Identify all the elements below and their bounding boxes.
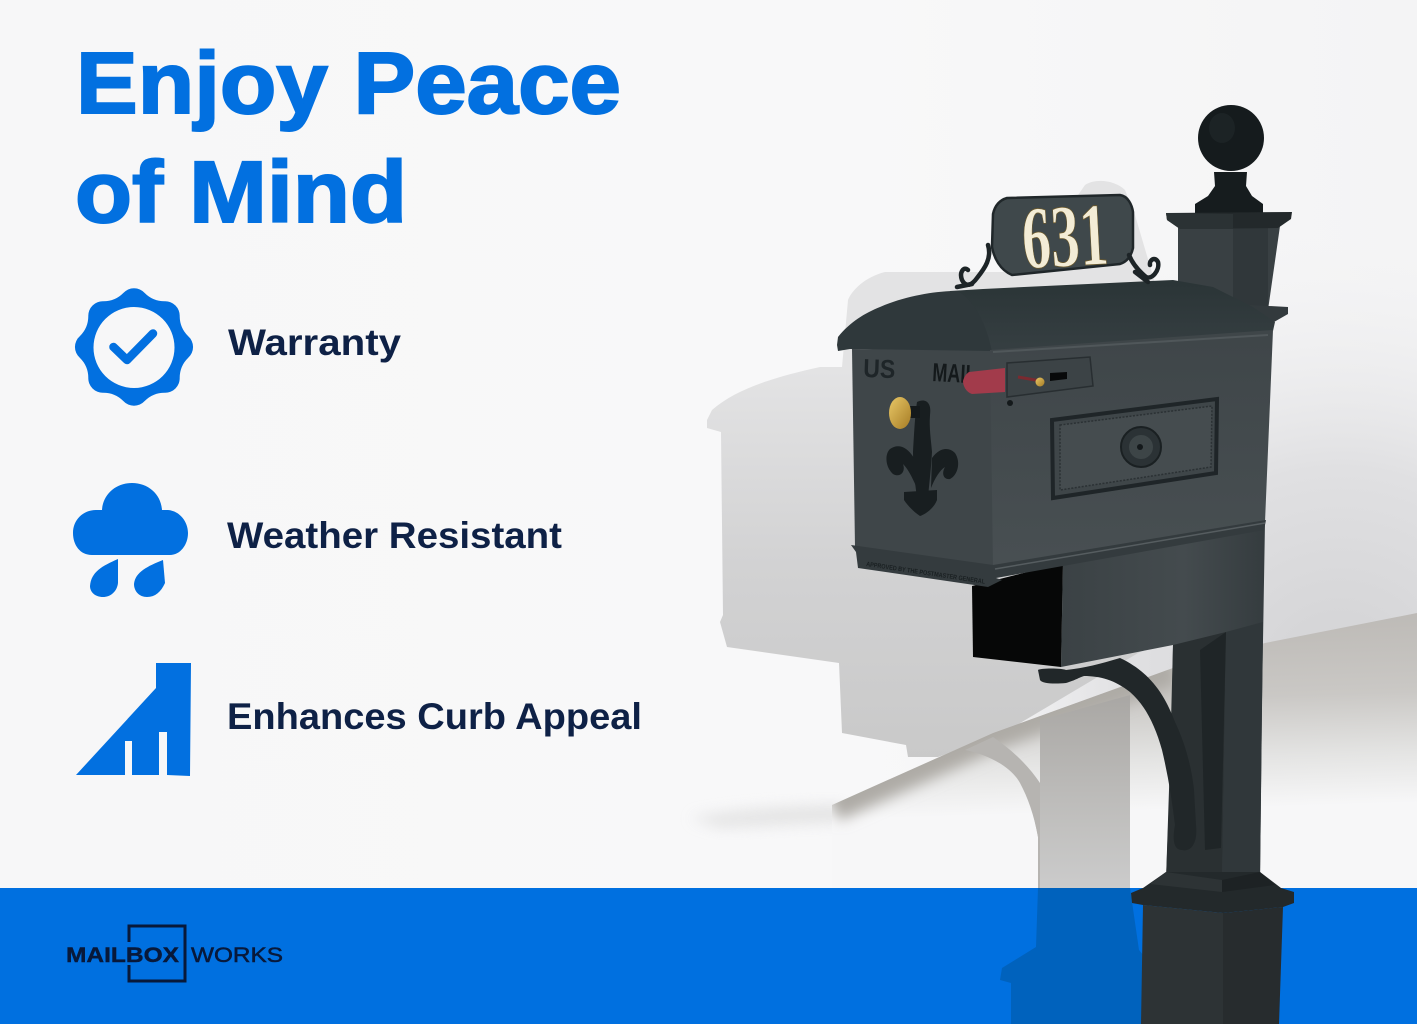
fleur-de-lis ornament xyxy=(886,401,958,516)
title: Enjoy Peace xyxy=(76,35,621,132)
logo: mailbox works: MAILBOX xyxy=(66,944,179,967)
plate scroll supports xyxy=(957,245,1158,287)
ground fade left xyxy=(690,804,860,828)
shadow on footer band xyxy=(1000,888,1160,1024)
wall shading xyxy=(800,200,1417,840)
title: of Mind xyxy=(75,144,407,241)
label: enhances curb appeal: Enhances Curb Appeal xyxy=(227,696,642,737)
mailbox product illustration xyxy=(837,105,1294,1024)
lower support post xyxy=(1061,522,1265,880)
post base trim xyxy=(1131,872,1294,913)
embossed lip text: APPROVED BY THE POSTMASTER GENERAL xyxy=(866,561,985,586)
red flag xyxy=(963,368,1005,394)
bracket shadow on ground xyxy=(965,737,1040,888)
box left face xyxy=(852,349,994,567)
box edge highlight xyxy=(993,335,1268,352)
slot plate xyxy=(1007,357,1093,406)
lid front arch xyxy=(837,291,992,352)
MAIL lettering: MAIL xyxy=(932,357,977,389)
blue footer band xyxy=(0,888,1417,1024)
title xyxy=(75,35,621,241)
address number: 631 xyxy=(1020,186,1111,288)
post ball finial xyxy=(1195,105,1264,213)
black parcel box xyxy=(972,563,1063,667)
icon: curb appeal building xyxy=(76,663,191,776)
icon: rain cloud xyxy=(73,483,188,597)
icon: warranty badge xyxy=(75,288,193,406)
US lettering: US xyxy=(863,353,896,384)
lid top surface xyxy=(950,280,1275,352)
base lip xyxy=(851,520,1266,587)
mailbox wall shadow xyxy=(707,181,1160,757)
ground contact edge shading xyxy=(832,668,1173,805)
brass knob xyxy=(889,397,920,429)
label: weather resistant: Weather Resistant xyxy=(227,515,562,556)
label: warranty: Warranty xyxy=(228,322,401,363)
post cap xyxy=(1166,212,1292,322)
curved bracket xyxy=(1038,658,1196,850)
panel oval emblem xyxy=(1121,427,1161,467)
raised door panel xyxy=(1052,399,1217,498)
logo: mailbox works xyxy=(66,926,283,981)
post shadow on ground xyxy=(1032,695,1130,888)
ground plane xyxy=(832,613,1417,888)
box right face xyxy=(990,330,1273,567)
post base column xyxy=(1141,905,1283,1024)
address plate xyxy=(992,186,1133,288)
logo: mailbox works: WORKS xyxy=(191,944,283,967)
